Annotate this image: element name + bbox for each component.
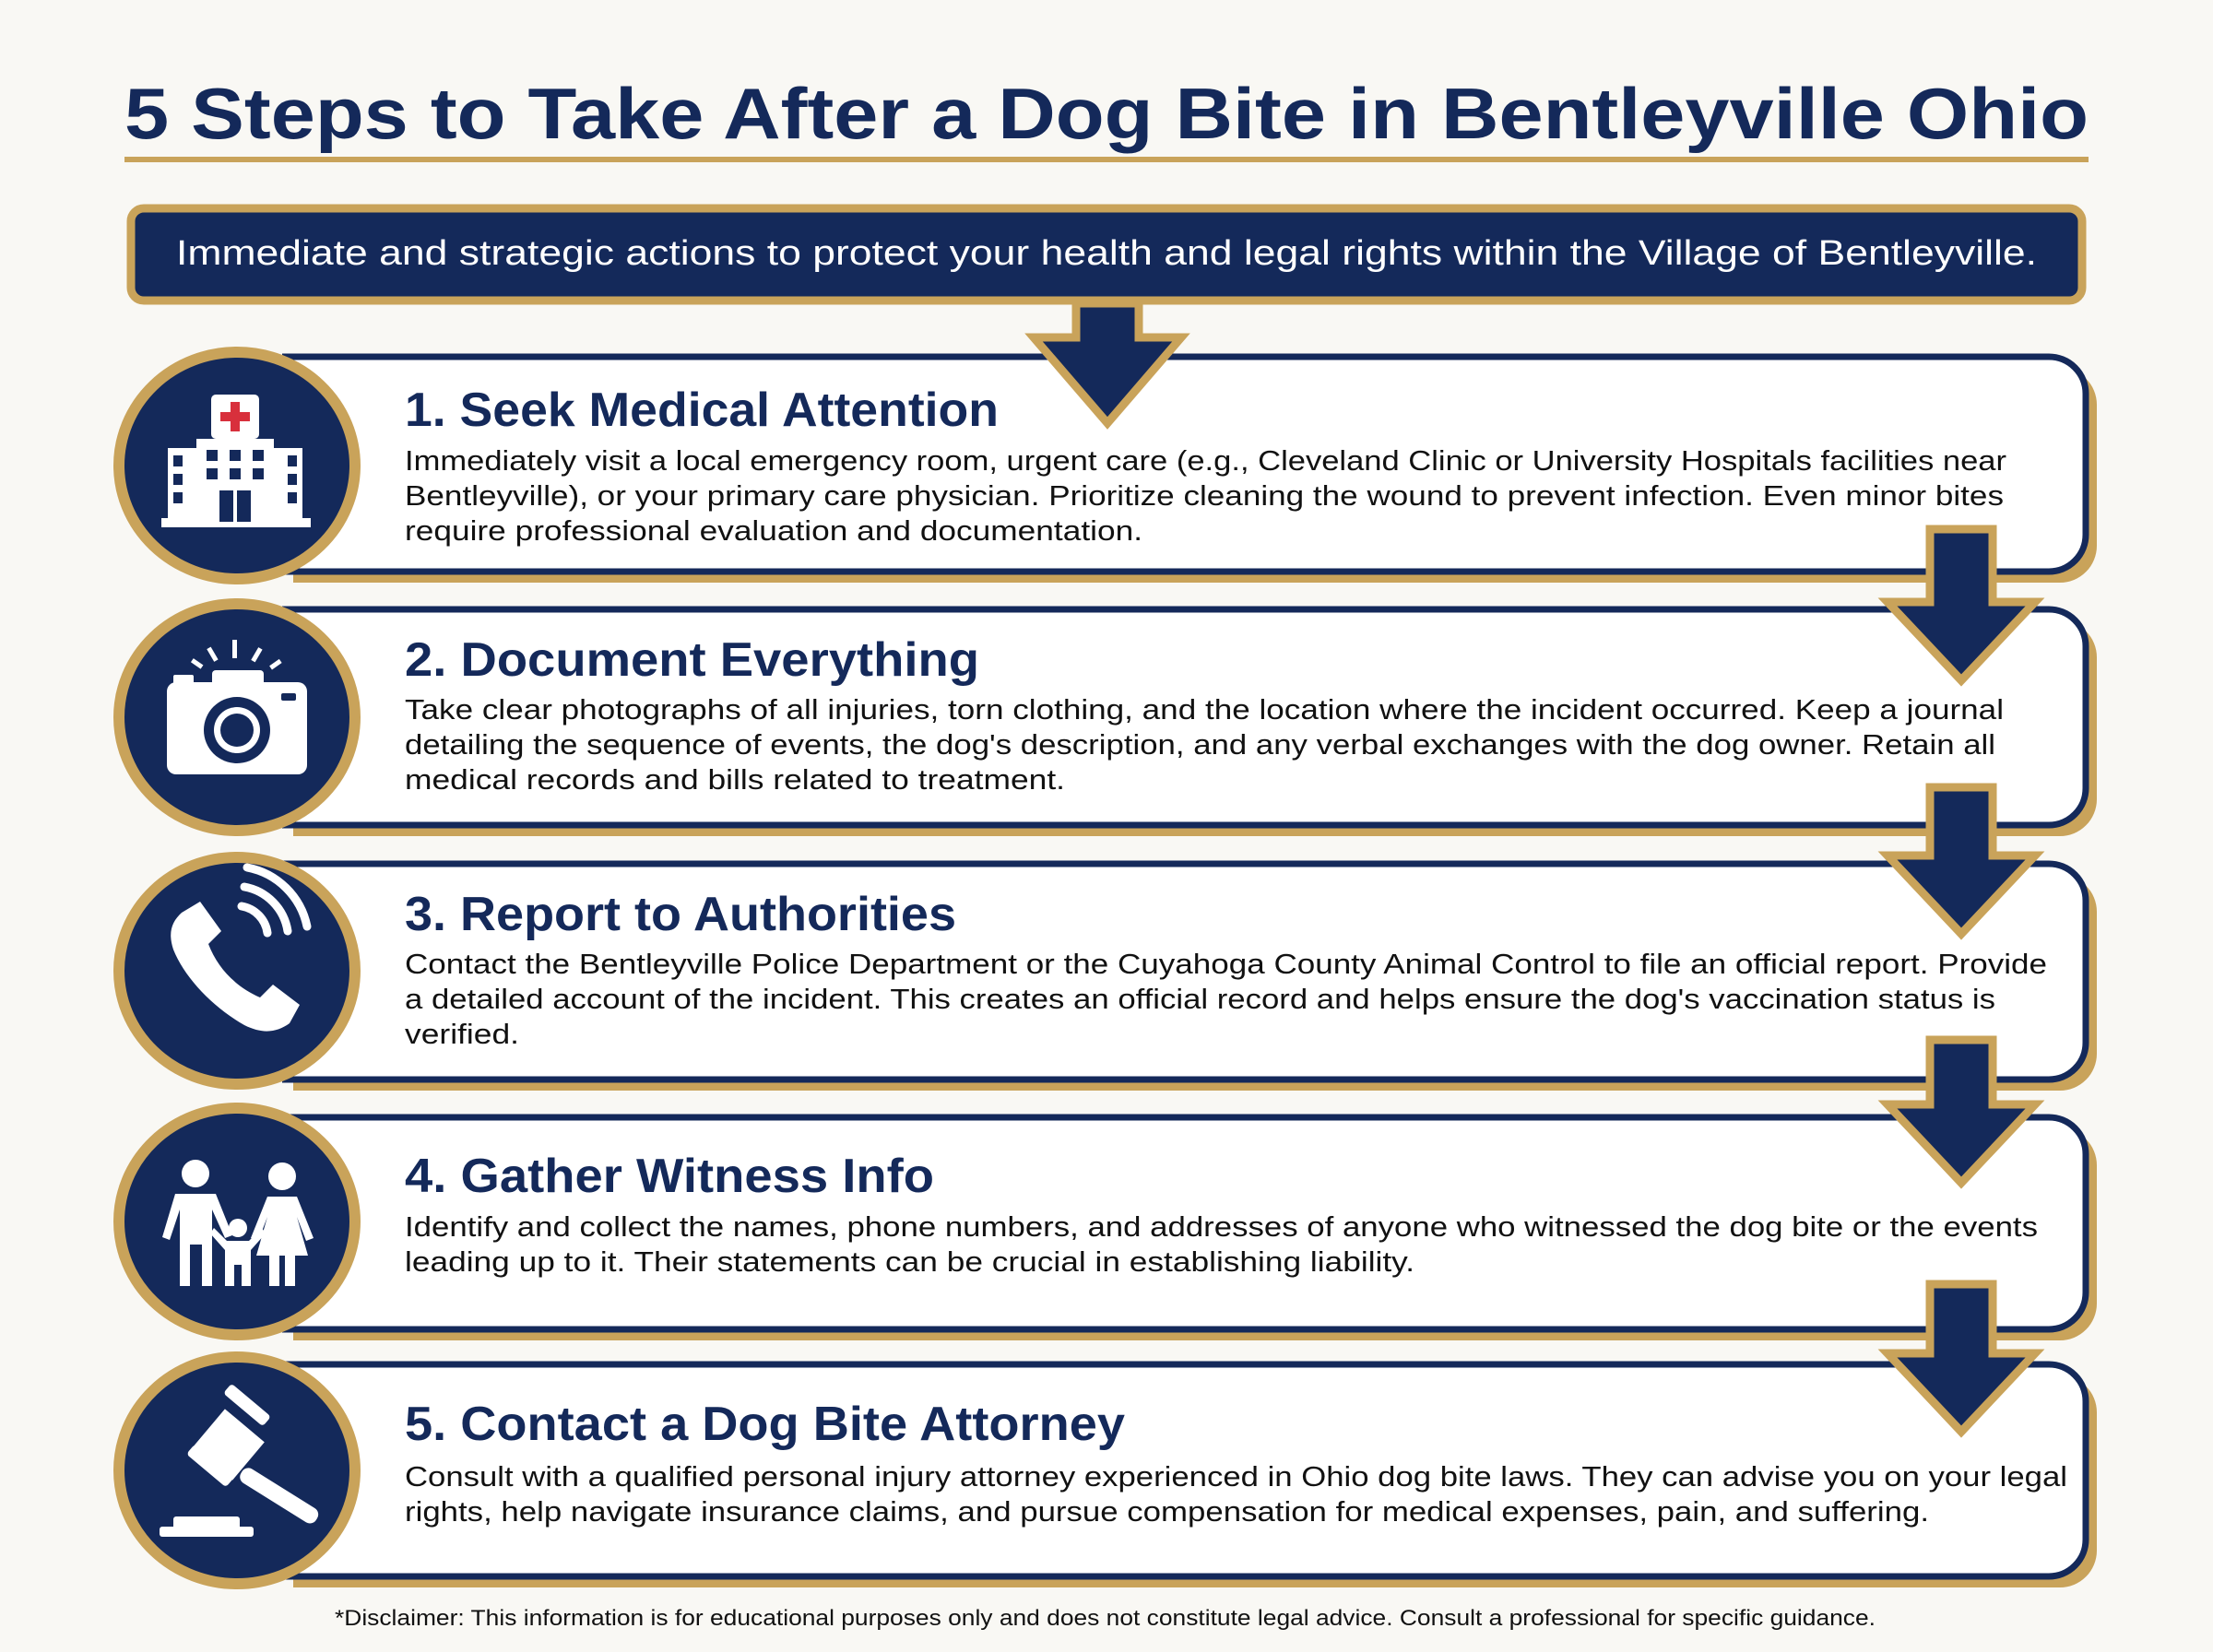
title: 5 Steps to Take After a Dog Bite in Bentleyville Ohio bbox=[124, 73, 2089, 154]
body 5 bbox=[405, 1460, 2067, 1528]
icon: phone bbox=[119, 857, 355, 1084]
card 2 bbox=[282, 609, 2097, 836]
body 1 bbox=[405, 444, 2006, 547]
body 3: verified. bbox=[405, 1018, 519, 1050]
body 1: Bentleyville), or your primary care physician. Prioritize cleaning the wound to prevent infection. Even minor bites bbox=[405, 479, 2004, 512]
body 1: require professional evaluation and documentation. bbox=[405, 514, 1142, 547]
body 2: detailing the sequence of events, the dog's description, and any verbal exchanges with the dog owner. Retain all bbox=[405, 728, 1995, 761]
card 4 bbox=[282, 1117, 2097, 1340]
icon: hospital bbox=[119, 352, 355, 579]
body 2 bbox=[405, 693, 2004, 796]
card 5 bbox=[282, 1364, 2097, 1587]
heading 4: 4. Gather Witness Info bbox=[405, 1150, 934, 1203]
body 4 bbox=[405, 1210, 2038, 1278]
body 3: Contact the Bentleyville Police Department or the Cuyahoga County Animal Control to file an official report. Provide bbox=[405, 948, 2047, 980]
arrow 4 to 5 bbox=[1888, 1284, 2035, 1432]
heading 5: 5. Contact a Dog Bite Attorney bbox=[405, 1398, 1125, 1451]
icon: family bbox=[119, 1108, 355, 1335]
heading 1: 1. Seek Medical Attention bbox=[405, 384, 999, 437]
body 3: a detailed account of the incident. This creates an official record and helps ensure the dog's vaccination status is bbox=[405, 983, 1995, 1015]
card 3 bbox=[282, 864, 2097, 1091]
disclaimer: *Disclaimer: This information is for educational purposes only and does not constitute legal advice. Consult a professional for specific guidance. bbox=[335, 1606, 1876, 1631]
subtitle banner bbox=[131, 208, 2082, 301]
icon: gavel bbox=[119, 1357, 355, 1584]
top arrow bbox=[1034, 303, 1181, 423]
arrow 2 to 3 bbox=[1888, 787, 2035, 934]
body 5: rights, help navigate insurance claims, and pursue compensation for medical expenses, pain, and suffering. bbox=[405, 1495, 1929, 1528]
arrow 3 to 4 bbox=[1888, 1040, 2035, 1183]
body 3 bbox=[405, 948, 2047, 1050]
icon: camera bbox=[119, 604, 355, 831]
body 4: leading up to it. Their statements can be crucial in establishing liability. bbox=[405, 1245, 1414, 1278]
body 1: Immediately visit a local emergency room, urgent care (e.g., Cleveland Clinic or University Hospitals facilities near bbox=[405, 444, 2006, 477]
body 2: Take clear photographs of all injuries, torn clothing, and the location where the incident occurred. Keep a journal bbox=[405, 693, 2004, 726]
body 2: medical records and bills related to treatment. bbox=[405, 763, 1065, 796]
body 5: Consult with a qualified personal injury attorney experienced in Ohio dog bite laws. They can advise you on your legal bbox=[405, 1460, 2067, 1493]
body 4: Identify and collect the names, phone numbers, and addresses of anyone who witnessed the dog bite or the events bbox=[405, 1210, 2038, 1243]
subtitle banner: Immediate and strategic actions to protect your health and legal rights within the Village of Bentleyville. bbox=[176, 234, 2037, 273]
arrow 1 to 2 bbox=[1888, 529, 2035, 680]
heading 3: 3. Report to Authorities bbox=[405, 888, 956, 941]
heading 2: 2. Document Everything bbox=[405, 633, 979, 687]
card 1 bbox=[282, 357, 2097, 583]
